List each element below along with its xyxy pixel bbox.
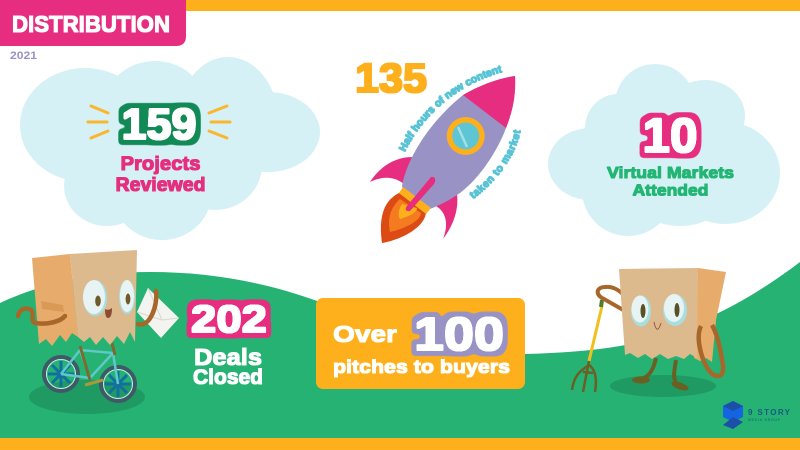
icon: eyes and mouth <box>83 280 135 318</box>
arm hanging <box>699 325 723 376</box>
bag front face <box>619 268 698 359</box>
label: virtual markets attended <box>607 165 734 200</box>
icon: pitchfork <box>572 300 602 392</box>
stat: 159: 159 <box>122 100 196 149</box>
top yellow bar <box>180 0 800 11</box>
bag side face <box>694 268 726 362</box>
curved label: half hours of new content: Half hours of new content <box>398 65 503 152</box>
character: bag on bicycle with envelope <box>18 250 179 414</box>
logo: 9 Story Media Group: 9 STORY <box>748 408 791 417</box>
icon: eyes and smile <box>631 294 687 329</box>
label: deals closed: Closed <box>193 366 263 389</box>
label: projects reviewed: Reviewed <box>116 175 206 196</box>
label: virtual markets attended: Virtual Markets <box>607 165 734 182</box>
logo: 9 Story Media Group <box>723 401 791 429</box>
label: deals closed <box>193 344 263 389</box>
icon: rocket <box>370 65 521 243</box>
label: virtual markets attended: Attended <box>632 182 708 200</box>
green hill background <box>0 262 800 440</box>
label: pitches to buyers: pitches to buyers <box>333 356 510 377</box>
panel: virtual markets cloud <box>548 64 780 236</box>
icon: envelope <box>137 288 179 338</box>
stat: 10: 10 <box>642 110 698 163</box>
character: bag with pitchfork <box>572 268 726 397</box>
panel: projects reviewed cloud <box>20 57 320 240</box>
arm holding pitchfork <box>598 287 625 311</box>
label: deals closed: Deals <box>194 344 262 370</box>
stat: 100: 100 <box>414 308 504 360</box>
label: over: Over <box>333 321 397 347</box>
title tab <box>0 0 186 46</box>
stat: 202: 202 <box>191 299 267 341</box>
stat: 135: 135 <box>355 55 427 101</box>
curved label: taken to market: taken to market <box>469 129 521 199</box>
label: projects reviewed <box>116 154 206 196</box>
bottom yellow bar <box>0 438 800 450</box>
arms <box>18 309 65 324</box>
label: projects reviewed: Projects <box>120 154 200 175</box>
logo: 9 Story Media Group: MEDIA GROUP <box>748 418 781 422</box>
panel: pitches to buyers <box>316 298 525 389</box>
bag side face <box>32 254 78 346</box>
legs <box>638 358 676 382</box>
year label: 2021 <box>10 50 37 62</box>
icon: bicycle <box>44 343 135 401</box>
bag front face <box>70 250 137 345</box>
title: DISTRIBUTION <box>12 11 170 37</box>
icon: sun rays <box>88 106 230 138</box>
arm fold <box>41 301 64 312</box>
